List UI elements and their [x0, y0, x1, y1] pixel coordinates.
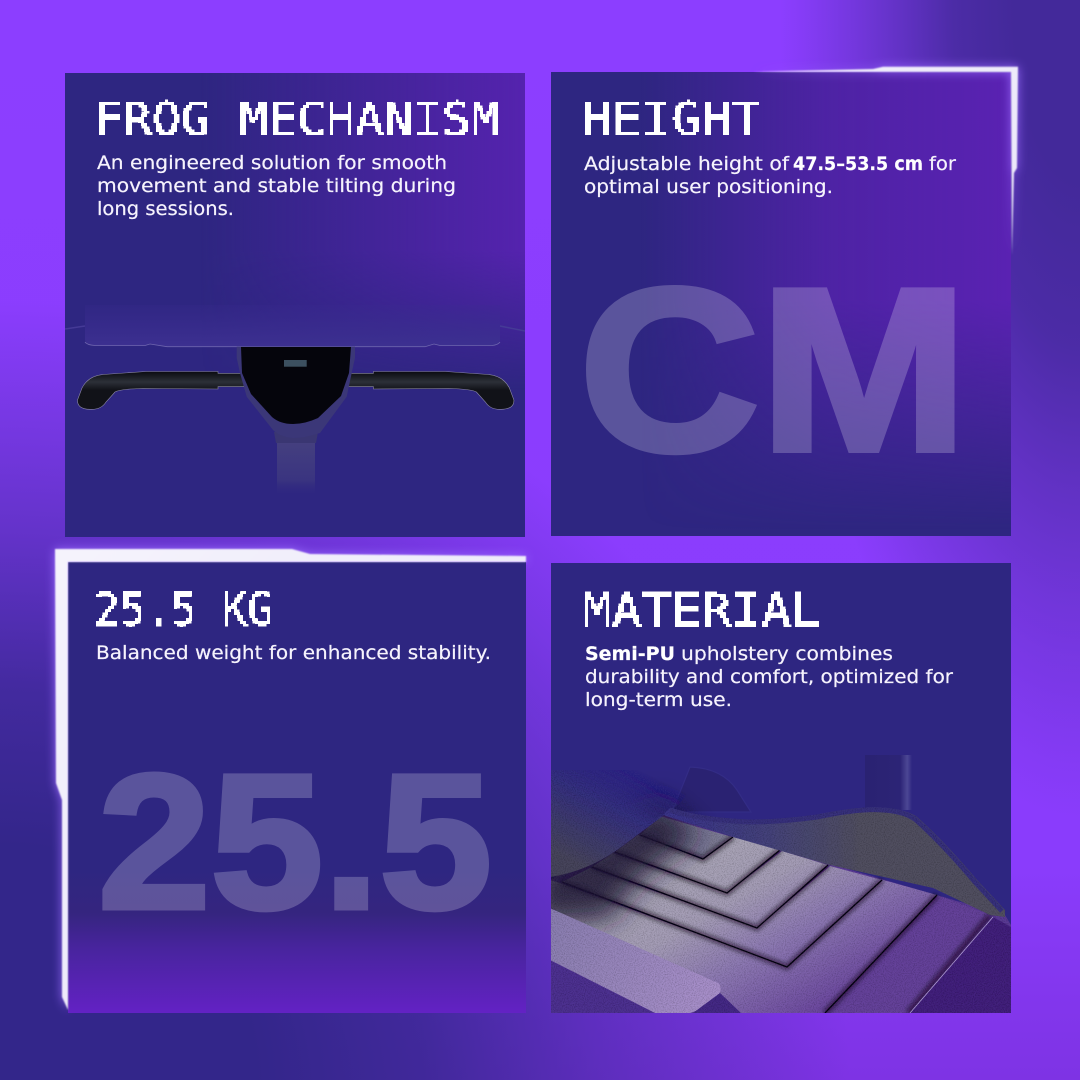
seat side rails	[65, 326, 525, 331]
back cushion	[550, 770, 690, 877]
large 25.5 watermark: 25.5	[98, 734, 492, 949]
description: upholstery combines	[681, 644, 893, 665]
title: 25.5 KG	[94, 583, 273, 636]
rear strut	[672, 767, 751, 812]
panel: weight	[55, 549, 526, 1013]
panel: frog mechanism	[65, 73, 525, 537]
seat underside	[85, 321, 500, 346]
seat tier 6	[825, 895, 990, 1013]
wing carbon rim	[670, 810, 1002, 911]
glowing corner frame	[55, 549, 526, 1010]
gas column	[277, 443, 315, 484]
seat base	[550, 815, 1011, 1013]
seam shadows	[562, 835, 990, 1013]
right side panel	[910, 917, 1011, 1013]
lower dark wedge	[693, 993, 741, 1013]
seat tier 5	[550, 880, 937, 1013]
description: long-term use.	[585, 690, 732, 711]
description: optimal user positioning.	[584, 177, 833, 198]
panel: height	[551, 67, 1018, 536]
description: Adjustable height of	[584, 154, 789, 175]
description: An engineered solution for smooth	[97, 153, 447, 174]
description: movement and stable tilting during	[97, 176, 456, 197]
seat tier 3	[592, 851, 828, 928]
right panel highlight	[910, 917, 993, 1013]
description: Balanced weight for enhanced stability.	[96, 643, 491, 664]
description	[97, 153, 456, 220]
lever: left	[77, 372, 244, 409]
mechanism housing	[237, 347, 355, 438]
panel 1 background	[65, 73, 525, 537]
panel 3 background	[68, 562, 526, 1013]
description	[584, 154, 956, 198]
front light panel	[550, 908, 721, 1013]
seat upholstery illustration	[530, 755, 1011, 1013]
description: Semi-PU	[585, 644, 675, 665]
title: FROG MECHANISM	[94, 93, 500, 146]
panel 4 background	[551, 563, 1011, 1013]
chair mechanism illustration	[65, 321, 525, 484]
description: for	[929, 154, 956, 175]
lever: right	[347, 372, 514, 409]
seat bottom highlight	[85, 342, 500, 347]
panel 2 background	[551, 72, 1011, 536]
large CM watermark: CM	[579, 241, 968, 500]
description	[585, 644, 953, 711]
glowing corner frame	[753, 67, 1018, 255]
glowing corner frame back	[55, 549, 526, 1010]
seat surface with tiers	[530, 770, 1011, 1013]
description: durability and comfort, optimized for	[585, 667, 953, 688]
lower dark trim	[550, 960, 655, 1013]
seat tier 1	[640, 816, 732, 858]
title: HEIGHT	[582, 93, 761, 146]
mechanism small part	[284, 360, 307, 367]
left end shading	[530, 800, 700, 925]
right strut	[865, 755, 912, 810]
side wing bolster	[663, 808, 1005, 917]
seat tier 2	[615, 835, 780, 893]
seat tier 4	[562, 866, 882, 967]
column collar	[274, 432, 318, 443]
description: long sessions.	[97, 199, 234, 220]
panel: material	[530, 563, 1011, 1013]
description: 47.5–53.5 cm	[793, 154, 923, 175]
mechanism inner shell	[241, 347, 351, 424]
title: MATERIAL	[582, 584, 821, 637]
seam lines	[562, 835, 937, 1013]
